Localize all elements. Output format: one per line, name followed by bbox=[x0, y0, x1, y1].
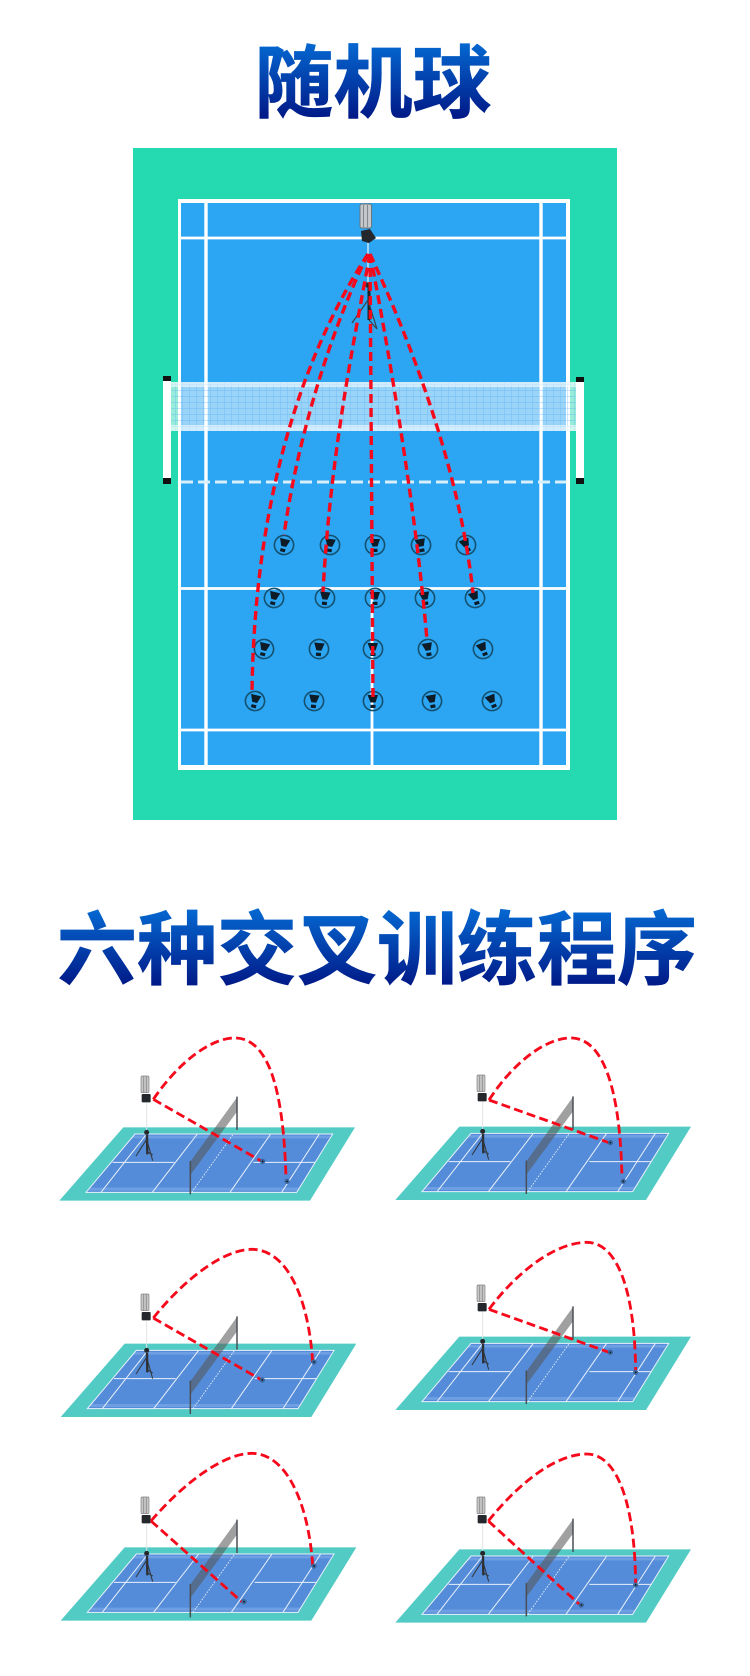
net bbox=[526, 1519, 573, 1616]
dashed line under net bbox=[181, 480, 566, 484]
flight paths bbox=[489, 1242, 636, 1372]
title: six cross training programs: 六种交叉训练程序 bbox=[57, 906, 697, 995]
net bbox=[190, 1097, 237, 1194]
targets bbox=[608, 1350, 638, 1375]
flight paths bbox=[153, 1249, 313, 1380]
panel: program 3 bbox=[61, 1249, 356, 1417]
court bbox=[61, 1344, 356, 1417]
machine bbox=[472, 1075, 489, 1160]
flight paths bbox=[489, 1038, 622, 1178]
targets bbox=[608, 1140, 626, 1184]
net bbox=[526, 1096, 573, 1194]
machine bbox=[472, 1497, 489, 1582]
flight paths bbox=[488, 1454, 636, 1604]
title: random shuttle: 随机球 bbox=[254, 39, 492, 128]
court bbox=[395, 1127, 691, 1200]
machine bbox=[136, 1076, 153, 1161]
court playing surface and lines bbox=[178, 199, 570, 770]
court bbox=[395, 1549, 691, 1623]
net bbox=[526, 1306, 573, 1404]
net bbox=[190, 1316, 237, 1414]
targets bbox=[260, 1360, 316, 1382]
panel: program 1 bbox=[59, 1038, 355, 1201]
targets bbox=[579, 1583, 638, 1607]
flight paths bbox=[151, 1453, 313, 1602]
targets bbox=[242, 1564, 316, 1604]
net bbox=[171, 382, 576, 431]
target shuttle markers bbox=[243, 533, 504, 713]
targets bbox=[260, 1159, 289, 1184]
panel: full court top view bbox=[133, 148, 617, 820]
machine bbox=[136, 1294, 153, 1379]
panel: program 5 bbox=[61, 1453, 356, 1621]
panel: program 6 bbox=[395, 1454, 691, 1623]
panel: program 4 bbox=[395, 1242, 691, 1410]
machine bbox=[472, 1285, 489, 1370]
machine bbox=[136, 1497, 153, 1582]
court bbox=[61, 1547, 356, 1621]
right net post bbox=[576, 377, 584, 484]
court surround bbox=[133, 148, 617, 820]
court bbox=[395, 1337, 691, 1410]
court bbox=[59, 1127, 355, 1201]
net bbox=[190, 1520, 237, 1617]
red flight paths bbox=[252, 254, 473, 700]
flight paths bbox=[153, 1038, 286, 1178]
ball machine top view bbox=[352, 204, 377, 329]
panel: program 2 bbox=[395, 1038, 691, 1200]
left net post bbox=[163, 376, 171, 484]
